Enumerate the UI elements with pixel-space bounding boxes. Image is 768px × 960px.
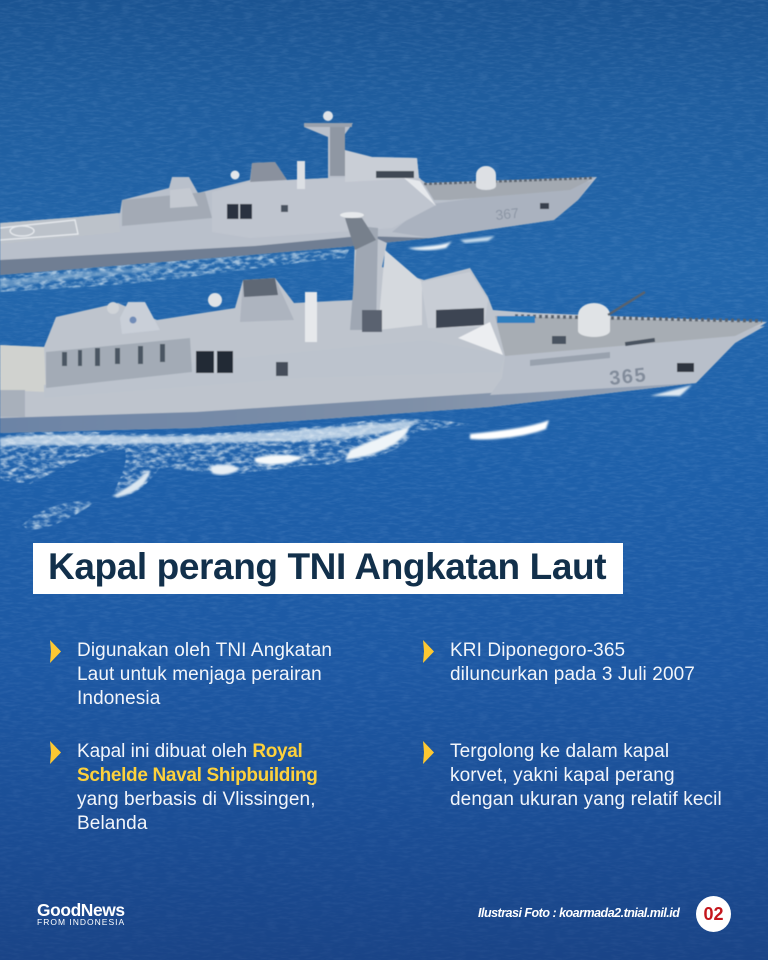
white slope	[458, 322, 503, 355]
waterline band	[0, 236, 431, 275]
hull number 365: 365	[608, 364, 648, 390]
bullet text	[77, 741, 318, 834]
waterline band	[0, 372, 696, 433]
bridge	[345, 150, 419, 182]
bullet: launch	[423, 640, 695, 685]
number 367: 367	[495, 205, 520, 223]
hangar block	[212, 178, 436, 238]
bullet text: yang berbasis di Vlissingen,	[77, 789, 316, 810]
bullet text: Laut untuk menjaga perairan	[77, 664, 322, 685]
hull bow side	[392, 181, 592, 238]
flight deck	[0, 213, 120, 244]
bridge	[421, 272, 488, 328]
bullet text: Kapal ini dibuat oleh Royal	[77, 741, 302, 762]
white launcher	[305, 292, 317, 342]
logo: GoodNews from Indonesia: GoodNews	[37, 900, 125, 920]
hull bow side	[490, 326, 765, 395]
bullet text	[77, 640, 332, 709]
bullet text	[450, 741, 722, 810]
lower superstructure	[44, 340, 505, 398]
funnel block	[240, 278, 294, 322]
bullet text: KRI Diponegoro-365	[450, 640, 625, 661]
arrow icon	[50, 741, 61, 764]
forward slope	[404, 178, 436, 206]
bullet text: korvet, yakni kapal perang	[450, 765, 675, 786]
title text: Kapal perang TNI Angkatan Laut	[48, 546, 606, 587]
doors	[196, 351, 233, 373]
gun turret	[476, 166, 496, 190]
hull silhouette	[0, 123, 597, 275]
ship: KRI 367 rear	[0, 111, 597, 275]
bullet text: dengan ukuran yang relatif kecil	[450, 789, 722, 810]
bullet: builder	[50, 741, 318, 834]
aft superstructure	[122, 192, 212, 226]
mast	[350, 226, 378, 330]
arrow icon	[50, 640, 61, 663]
foredeck	[424, 178, 594, 200]
page number badge	[696, 896, 731, 932]
ship: KRI 365 front	[0, 212, 767, 433]
fore deck	[495, 316, 764, 356]
flight deck	[0, 345, 46, 392]
gun turret	[578, 303, 610, 337]
bullet: corvette class	[423, 741, 722, 810]
arrow icon	[423, 640, 434, 663]
bullet text: Digunakan oleh TNI Angkatan	[77, 640, 332, 661]
bullet text	[450, 640, 695, 685]
bullet text: Indonesia	[77, 688, 160, 709]
title banner	[33, 543, 623, 594]
arrow icon	[423, 741, 434, 764]
funnel block	[250, 162, 287, 184]
photo credit: Ilustrasi Foto : koarmada2.tnial.mil.id	[478, 906, 679, 920]
hull silhouette	[0, 213, 767, 433]
wake of front ship	[0, 385, 692, 530]
bullet: usage	[50, 640, 332, 709]
mast	[330, 125, 345, 176]
page number badge: 02	[703, 904, 724, 924]
wake of rear ship	[0, 236, 495, 292]
aft deck gallery	[46, 338, 192, 388]
bullet text: Tergolong ke dalam kapal	[450, 741, 669, 762]
logo: GoodNews from Indonesia: FROM INDONESIA	[37, 917, 125, 927]
bullet text: Belanda	[77, 813, 148, 834]
bullet text: diluncurkan pada 3 Juli 2007	[450, 664, 695, 685]
bullet text: Schelde Naval Shipbuilding	[77, 765, 318, 786]
